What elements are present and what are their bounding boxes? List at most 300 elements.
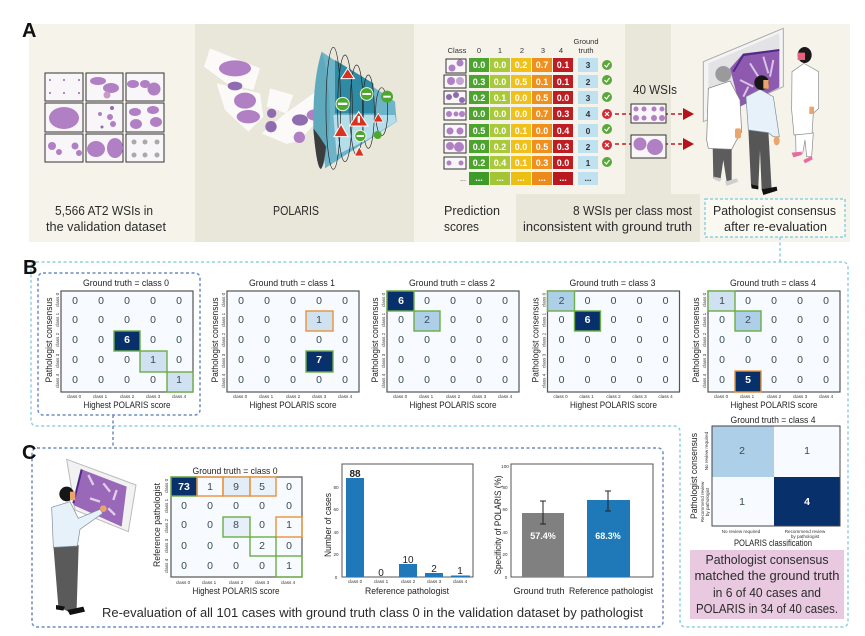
matrix: ground truth class 2: 0	[398, 314, 404, 326]
matrix: reference pathologist: 1	[207, 481, 213, 493]
bar chart: specificity of POLARIS: Specificity of POLARIS (%)	[493, 476, 504, 574]
table: prediction scores: 2	[586, 142, 591, 152]
table: prediction scores	[444, 37, 612, 185]
matrix: ground truth class 2: Highest POLARIS score	[410, 400, 496, 411]
matrix: ground truth class 3: 0	[585, 374, 591, 386]
bar chart: specificity of POLARIS: 0	[505, 575, 508, 580]
matrix: ground truth class 0	[44, 278, 193, 411]
matrix: ground truth class 3: 0	[637, 354, 643, 366]
matrix: reference pathologist: 0	[207, 519, 213, 531]
matrix: ground truth class 1: 7	[316, 354, 322, 366]
matrix: ground truth class 3: 0	[585, 334, 591, 346]
caption: 8 WSIs per class	[523, 203, 692, 234]
bar chart: number of cases: 0	[335, 575, 338, 580]
bar chart: specificity of POLARIS: 57.4%	[530, 531, 556, 541]
matrix: ground truth class 3: 0	[611, 334, 617, 346]
matrix: ground truth class 1: class 3	[312, 394, 327, 399]
matrix: ground truth class 1: 0	[290, 374, 296, 386]
bar chart: number of cases: class 1	[374, 579, 389, 584]
matrix: ground truth class 2: class 1	[419, 394, 434, 399]
matrix: ground truth class 4: 5	[745, 374, 751, 386]
caption: re-evaluation: Re-evaluation of all 101 cases with ground truth class 0 in the validation dataset by pathologist	[102, 605, 643, 620]
matrix: ground truth class 1: 0	[316, 334, 322, 346]
table: prediction scores: 0.4	[557, 126, 569, 136]
matrix: ground truth class 0: 0	[72, 295, 78, 307]
matrix: reference pathologist: 0	[259, 500, 265, 512]
matrix: ground truth class 1: 0	[342, 314, 348, 326]
matrix: review recommendation class 4: by pathologist	[791, 534, 820, 539]
matrix: ground truth class 1: 0	[238, 374, 244, 386]
matrix: reference pathologist: class 3	[164, 538, 169, 553]
matrix: reference pathologist: 1	[286, 560, 292, 572]
matrix: ground truth class 1: 0	[342, 374, 348, 386]
matrix: ground truth class 1: 0	[238, 314, 244, 326]
bar chart: number of cases: class 2	[401, 579, 416, 584]
matrix: ground truth class 1: 0	[264, 334, 270, 346]
matrix: review recommendation class 4: No review required	[704, 431, 709, 470]
matrix: ground truth class 2: 0	[398, 374, 404, 386]
matrix: ground truth class 2: 0	[476, 314, 482, 326]
matrix: ground truth class 4: 0	[823, 374, 829, 386]
matrix: reference pathologist: 0	[233, 560, 239, 572]
table: prediction scores: 1	[586, 158, 591, 168]
table: prediction scores: ...	[460, 176, 466, 183]
matrix: ground truth class 1: class 3	[221, 353, 226, 368]
matrix: ground truth class 1: 0	[342, 295, 348, 307]
matrix: ground truth class 2: 6	[398, 295, 404, 307]
bar chart: specificity of POLARIS: 20	[502, 552, 508, 557]
matrix: ground truth class 0: 0	[98, 295, 104, 307]
matrix: ground truth class 1: 0	[264, 374, 270, 386]
matrix: ground truth class 3: 0	[611, 374, 617, 386]
matrix: reference pathologist	[152, 466, 302, 597]
matrix: ground truth class 2: 0	[424, 295, 430, 307]
matrix: reference pathologist: class 3	[255, 580, 270, 585]
matrix: ground truth class 3: 0	[559, 334, 565, 346]
matrix: reference pathologist: 0	[286, 540, 292, 552]
table: prediction scores: 0.5	[536, 93, 548, 103]
matrix: ground truth class 2: 0	[476, 295, 482, 307]
matrix: ground truth class 2: 0	[476, 334, 482, 346]
matrix: ground truth class 3: 0	[611, 295, 617, 307]
heading: C: C	[22, 442, 36, 464]
matrix: ground truth class 3: Highest POLARIS score	[570, 400, 657, 411]
matrix: ground truth class 0: 1	[176, 374, 182, 386]
table: prediction scores: 0	[477, 46, 481, 55]
table: prediction scores: 0.1	[557, 60, 569, 70]
matrix: ground truth class 0: 0	[72, 374, 78, 386]
matrix: ground truth class 4: 0	[797, 374, 803, 386]
table: prediction scores: 0.0	[473, 109, 485, 119]
matrix: ground truth class 4: class 1	[702, 312, 707, 327]
matrix: ground truth class 1: 0	[264, 295, 270, 307]
matrix: ground truth class 2: class 0	[381, 292, 386, 307]
matrix: ground truth class 3: class 1	[542, 312, 546, 327]
table: prediction scores: 0.0	[494, 60, 506, 70]
table: prediction scores: 0.3	[536, 158, 548, 168]
matrix: ground truth class 3: 0	[663, 334, 669, 346]
table: prediction scores: 3	[586, 93, 591, 103]
matrix: ground truth class 4: 0	[719, 374, 725, 386]
table: prediction scores: 1	[498, 46, 502, 55]
bar chart: number of cases: class 4	[453, 579, 468, 584]
callout: consensus summary: matched the ground truth	[694, 568, 840, 583]
arrows: selected WSIs to pathologists	[615, 104, 694, 158]
matrix: ground truth class 0: 0	[176, 334, 182, 346]
table: prediction scores: ...	[517, 173, 525, 183]
matrix: ground truth class 2: 0	[502, 334, 508, 346]
bar chart: specificity of POLARIS: 80	[502, 485, 508, 490]
bar chart: number of cases: Number of cases	[323, 493, 334, 557]
bar chart: number of cases: 1	[457, 566, 463, 577]
illustration: POLARIS network funnel	[204, 47, 397, 169]
table: prediction scores: 0.0	[473, 60, 485, 70]
matrix: ground truth class 0: class 0	[67, 394, 82, 399]
heading: A: A	[22, 20, 36, 42]
matrix: ground truth class 0: class 3	[55, 353, 60, 368]
table: prediction scores: 0.0	[557, 158, 569, 168]
matrix: ground truth class 2: 0	[398, 334, 404, 346]
matrix: ground truth class 4	[691, 278, 840, 411]
matrix: ground truth class 4: 0	[823, 295, 829, 307]
matrix: ground truth class 0: 0	[98, 314, 104, 326]
illustration: pathologist at screen	[52, 459, 136, 615]
bar chart: number of cases: class 3	[427, 579, 442, 584]
matrix: ground truth class 0: class 4	[172, 394, 187, 399]
matrix: ground truth class 0: 0	[124, 295, 130, 307]
WSI thumbnail grid	[45, 73, 164, 162]
matrix: reference pathologist: 9	[233, 481, 239, 493]
table: prediction scores: 0.0	[557, 93, 569, 103]
matrix: ground truth class 3: Ground truth = class 3	[570, 278, 656, 289]
matrix: ground truth class 1: Ground truth = class 1	[249, 278, 335, 289]
matrix: ground truth class 4: Ground truth = class 4	[730, 278, 816, 289]
matrix: ground truth class 0: 1	[150, 354, 156, 366]
matrix: ground truth class 2: 0	[502, 314, 508, 326]
matrix: reference pathologist: 2	[259, 540, 265, 552]
matrix: ground truth class 3: 0	[559, 374, 565, 386]
matrix: ground truth class 2: Ground truth = class 2	[409, 278, 495, 289]
bar chart: specificity of POLARIS: 100	[501, 464, 509, 469]
matrix: ground truth class 1: 1	[316, 314, 322, 326]
matrix: ground truth class 4: 0	[797, 334, 803, 346]
matrix: ground truth class 2: 2	[424, 314, 430, 326]
matrix: ground truth class 2: 0	[502, 354, 508, 366]
matrix: ground truth class 0: Highest POLARIS score	[84, 400, 170, 411]
matrix: reference pathologist: 5	[259, 481, 265, 493]
caption: 8 WSIs per class: inconsistent with ground truth	[523, 219, 692, 234]
matrix: ground truth class 4: class 1	[740, 394, 755, 399]
matrix: reference pathologist: class 1	[202, 580, 217, 585]
table: prediction scores: 0.0	[536, 126, 548, 136]
matrix: review recommendation class 4: by pathologist	[705, 487, 710, 516]
table: prediction scores: 0.1	[557, 77, 569, 87]
table: prediction scores: 0.0	[515, 93, 527, 103]
bar chart: specificity of POLARIS: Reference pathologist	[569, 586, 653, 597]
matrix: ground truth class 2: 0	[502, 374, 508, 386]
matrix: review recommendation class 4: 1	[804, 445, 810, 457]
matrix: ground truth class 2: 0	[450, 374, 456, 386]
table: prediction scores: 3	[586, 60, 591, 70]
matrix: ground truth class 4: 0	[797, 314, 803, 326]
matrix: review recommendation class 4: Recommend review	[700, 481, 705, 522]
matrix: reference pathologist: class 0	[176, 580, 191, 585]
matrix: ground truth class 0: 0	[124, 374, 130, 386]
matrix: review recommendation class 4: POLARIS classification	[734, 538, 812, 549]
matrix: ground truth class 4: 0	[823, 334, 829, 346]
caption: 8 WSIs per class: 8 WSIs per class most	[573, 203, 692, 218]
matrix: ground truth class 2: 0	[398, 354, 404, 366]
matrix: reference pathologist: class 0	[164, 478, 169, 493]
matrix: ground truth class 3: class 3	[632, 394, 647, 399]
matrix: ground truth class 2: 0	[450, 354, 456, 366]
matrix: ground truth class 1: class 2	[286, 394, 301, 399]
matrix: ground truth class 3: class 2	[542, 332, 546, 347]
matrix: ground truth class 3: 0	[663, 314, 669, 326]
matrix: ground truth class 0: class 3	[146, 394, 161, 399]
table: prediction scores: 0	[586, 126, 591, 136]
matrix: ground truth class 0: 0	[124, 354, 130, 366]
matrix: ground truth class 3: 0	[637, 314, 643, 326]
matrix: ground truth class 3: class 4	[658, 394, 673, 399]
matrix: ground truth class 2: 0	[424, 334, 430, 346]
matrix: reference pathologist: class 2	[229, 580, 244, 585]
matrix: reference pathologist: Ground truth = class 0	[192, 466, 278, 477]
class thumbnails	[444, 59, 466, 169]
matrix: ground truth class 3: class 1	[579, 394, 594, 399]
matrix: ground truth class 4: 0	[719, 314, 725, 326]
callout: consensus summary	[690, 550, 844, 619]
matrix: ground truth class 4: 2	[745, 314, 751, 326]
matrix: ground truth class 3: 0	[585, 295, 591, 307]
matrix: ground truth class 3: 0	[611, 354, 617, 366]
matrix: ground truth class 1: class 1	[259, 394, 274, 399]
bar chart: specificity of POLARIS	[493, 464, 653, 597]
matrix: ground truth class 4: class 2	[767, 394, 782, 399]
matrix: ground truth class 2: 0	[424, 374, 430, 386]
bar chart: specificity of POLARIS: 40	[502, 530, 508, 535]
matrix: review recommendation class 4: Pathologist consensus	[689, 433, 700, 519]
matrix: ground truth class 3: 0	[663, 354, 669, 366]
table: prediction scores: 0.2	[515, 60, 527, 70]
table: prediction scores: 0.0	[494, 126, 506, 136]
table: prediction scores: 0.0	[473, 142, 485, 152]
table: prediction scores: Class	[448, 46, 467, 55]
caption: prediction scores: Prediction	[444, 203, 500, 218]
bar chart: number of cases: class 0	[348, 579, 363, 584]
matrix: ground truth class 3: class 0	[542, 292, 546, 307]
table: prediction scores: 0.3	[473, 77, 485, 87]
status icons	[602, 60, 612, 167]
matrix: ground truth class 4: Highest POLARIS score	[730, 400, 818, 411]
table: prediction scores: 2	[520, 46, 524, 55]
matrix: ground truth class 2: 0	[476, 374, 482, 386]
matrix: ground truth class 3	[530, 278, 680, 411]
table: prediction scores: 0.2	[473, 158, 485, 168]
bar chart: specificity of POLARIS: Ground truth	[514, 586, 564, 597]
callout: consensus summary: Pathologist consensus	[706, 552, 829, 567]
matrix: review recommendation class 4: Ground truth = class 4	[730, 415, 816, 426]
matrix: ground truth class 4: 0	[823, 314, 829, 326]
matrix: ground truth class 3: 0	[559, 314, 565, 326]
matrix: ground truth class 0: class 4	[55, 373, 60, 388]
matrix: ground truth class 4: 0	[745, 354, 751, 366]
panel B outline	[31, 237, 848, 627]
matrix: ground truth class 4: class 0	[702, 292, 707, 307]
matrix: ground truth class 1: 0	[342, 354, 348, 366]
matrix: ground truth class 4: 0	[771, 374, 777, 386]
matrix: ground truth class 1: 0	[290, 295, 296, 307]
bar chart: number of cases: 0	[378, 568, 384, 579]
matrix: reference pathologist: 8	[233, 519, 239, 531]
matrix: ground truth class 1: 0	[264, 314, 270, 326]
table: prediction scores: 0.5	[515, 77, 527, 87]
matrix: ground truth class 0: 0	[72, 334, 78, 346]
matrix: ground truth class 1: class 0	[221, 292, 226, 307]
matrix: ground truth class 0: class 2	[120, 394, 135, 399]
matrix: ground truth class 1: class 1	[221, 312, 226, 327]
table: prediction scores: 0.0	[515, 109, 527, 119]
matrix: ground truth class 3: 6	[585, 314, 591, 326]
bar chart: number of cases: Reference pathologist	[365, 586, 449, 597]
matrix: reference pathologist: 0	[181, 500, 187, 512]
matrix: ground truth class 1: class 2	[221, 332, 226, 347]
matrix: ground truth class 2: 0	[476, 354, 482, 366]
matrix: ground truth class 3: Pathologist consensus	[530, 297, 542, 382]
caption: pathologist consensus box	[705, 199, 845, 237]
matrix: ground truth class 1: 0	[238, 295, 244, 307]
panel A: workflow background	[29, 24, 850, 242]
matrix: reference pathologist: 0	[207, 540, 213, 552]
table: prediction scores: 2	[586, 77, 591, 87]
matrix: ground truth class 1	[210, 278, 359, 411]
matrix: ground truth class 1: 0	[264, 354, 270, 366]
table: prediction scores: ...	[559, 173, 567, 183]
matrix: ground truth class 3: 0	[637, 334, 643, 346]
matrix: ground truth class 4: class 3	[702, 353, 707, 368]
heading: B: B	[23, 257, 37, 279]
table: prediction scores: 0.3	[557, 142, 569, 152]
bar chart: number of cases: 60	[333, 507, 339, 512]
table: prediction scores: 0.0	[515, 142, 527, 152]
matrix: review recommendation class 4: Recommend review	[785, 529, 826, 534]
matrix: ground truth class 2	[370, 278, 519, 411]
matrix: reference pathologist: 0	[181, 560, 187, 572]
matrix: reference pathologist: 0	[259, 519, 265, 531]
caption: validation dataset	[46, 203, 166, 234]
matrix: ground truth class 4: class 4	[819, 394, 834, 399]
matrix: ground truth class 3: 0	[611, 314, 617, 326]
bar chart: number of cases: 20	[333, 552, 339, 557]
matrix: ground truth class 2: Pathologist consensus	[370, 297, 381, 382]
matrix: reference pathologist: class 1	[164, 498, 169, 513]
caption: pathologist consensus box: after re-evaluation	[724, 219, 827, 234]
matrix: ground truth class 3: 0	[559, 354, 565, 366]
label: 40 WSIs: 40 WSIs	[633, 82, 677, 97]
highlight box: class 0 matrix	[38, 273, 200, 415]
bar chart: number of cases: 2	[431, 564, 437, 575]
matrix: ground truth class 3: 0	[663, 295, 669, 307]
matrix: ground truth class 3: class 3	[542, 353, 546, 368]
table: prediction scores: truth	[578, 46, 594, 55]
matrix: ground truth class 0: 6	[124, 334, 130, 346]
panel C outline	[32, 448, 663, 627]
bar chart: number of cases: 40	[333, 530, 339, 535]
table: prediction scores: 0.3	[557, 109, 569, 119]
matrix: ground truth class 4: Pathologist consensus	[691, 297, 702, 382]
matrix: review recommendation class 4: 1	[739, 496, 745, 508]
connector B to C	[112, 415, 114, 448]
caption: prediction scores: scores	[444, 219, 479, 234]
matrix: reference pathologist: 73	[178, 481, 190, 493]
matrix: ground truth class 0: class 1	[93, 394, 108, 399]
matrix: ground truth class 2: class 2	[446, 394, 461, 399]
matrix: reference pathologist: Highest POLARIS score	[192, 586, 280, 597]
matrix: ground truth class 3: class 0	[553, 394, 568, 399]
matrix: ground truth class 2: 0	[450, 314, 456, 326]
matrix: ground truth class 0: 0	[98, 334, 104, 346]
matrix: ground truth class 2: class 2	[381, 332, 386, 347]
matrix: ground truth class 2: class 1	[381, 312, 386, 327]
matrix: ground truth class 3: 0	[663, 374, 669, 386]
callout: consensus summary: in 6 of 40 cases and	[713, 585, 821, 600]
matrix: ground truth class 2: class 3	[472, 394, 487, 399]
matrix: reference pathologist: 0	[207, 560, 213, 572]
table: prediction scores: 0.7	[536, 60, 548, 70]
bar chart: number of cases: 10	[402, 555, 414, 566]
table: prediction scores: 4	[559, 46, 563, 55]
matrix: reference pathologist: 0	[181, 519, 187, 531]
matrix: ground truth class 1: class 4	[338, 394, 353, 399]
matrix: ground truth class 3: 2	[559, 295, 565, 307]
matrix: ground truth class 4: 0	[719, 334, 725, 346]
matrix: ground truth class 3: 0	[585, 354, 591, 366]
matrix: ground truth class 4: 0	[771, 354, 777, 366]
matrix: ground truth class 0: 0	[98, 354, 104, 366]
matrix: ground truth class 0: class 2	[55, 332, 60, 347]
table: prediction scores: 0.0	[494, 109, 506, 119]
table: prediction scores: 0.0	[494, 77, 506, 87]
matrix: ground truth class 1: 0	[316, 374, 322, 386]
matrix: ground truth class 4: class 4	[702, 373, 707, 388]
matrix: ground truth class 4: 0	[745, 334, 751, 346]
illustration: pathologists at screen	[703, 28, 819, 195]
matrix: ground truth class 1: Pathologist consensus	[210, 297, 221, 382]
table: prediction scores: 0.2	[473, 93, 485, 103]
matrix: reference pathologist: class 4	[164, 558, 169, 573]
table: prediction scores: 0.2	[494, 142, 506, 152]
matrix: ground truth class 3: class 4	[542, 373, 546, 388]
matrix: ground truth class 0: class 0	[55, 292, 60, 307]
table: prediction scores: Ground	[573, 37, 599, 46]
bar chart: number of cases: 88	[349, 469, 361, 480]
matrix: ground truth class 4: 0	[797, 295, 803, 307]
matrix: ground truth class 3: 0	[637, 295, 643, 307]
matrix: ground truth class 4: class 0	[714, 394, 729, 399]
matrix: review recommendation class 4: 4	[804, 496, 810, 508]
matrix: ground truth class 0: Ground truth = class 0	[83, 278, 169, 289]
table: prediction scores: 0.5	[536, 142, 548, 152]
matrix: ground truth class 4: class 3	[793, 394, 808, 399]
matrix: reference pathologist: 0	[286, 481, 292, 493]
matrix: ground truth class 4: class 2	[702, 332, 707, 347]
matrix: reference pathologist: 0	[286, 500, 292, 512]
bar chart: number of cases	[323, 464, 473, 597]
matrix: ground truth class 2: 0	[424, 354, 430, 366]
matrix: ground truth class 4: 0	[797, 354, 803, 366]
matrix: ground truth class 1: class 4	[221, 373, 226, 388]
matrix: ground truth class 0: 0	[176, 295, 182, 307]
